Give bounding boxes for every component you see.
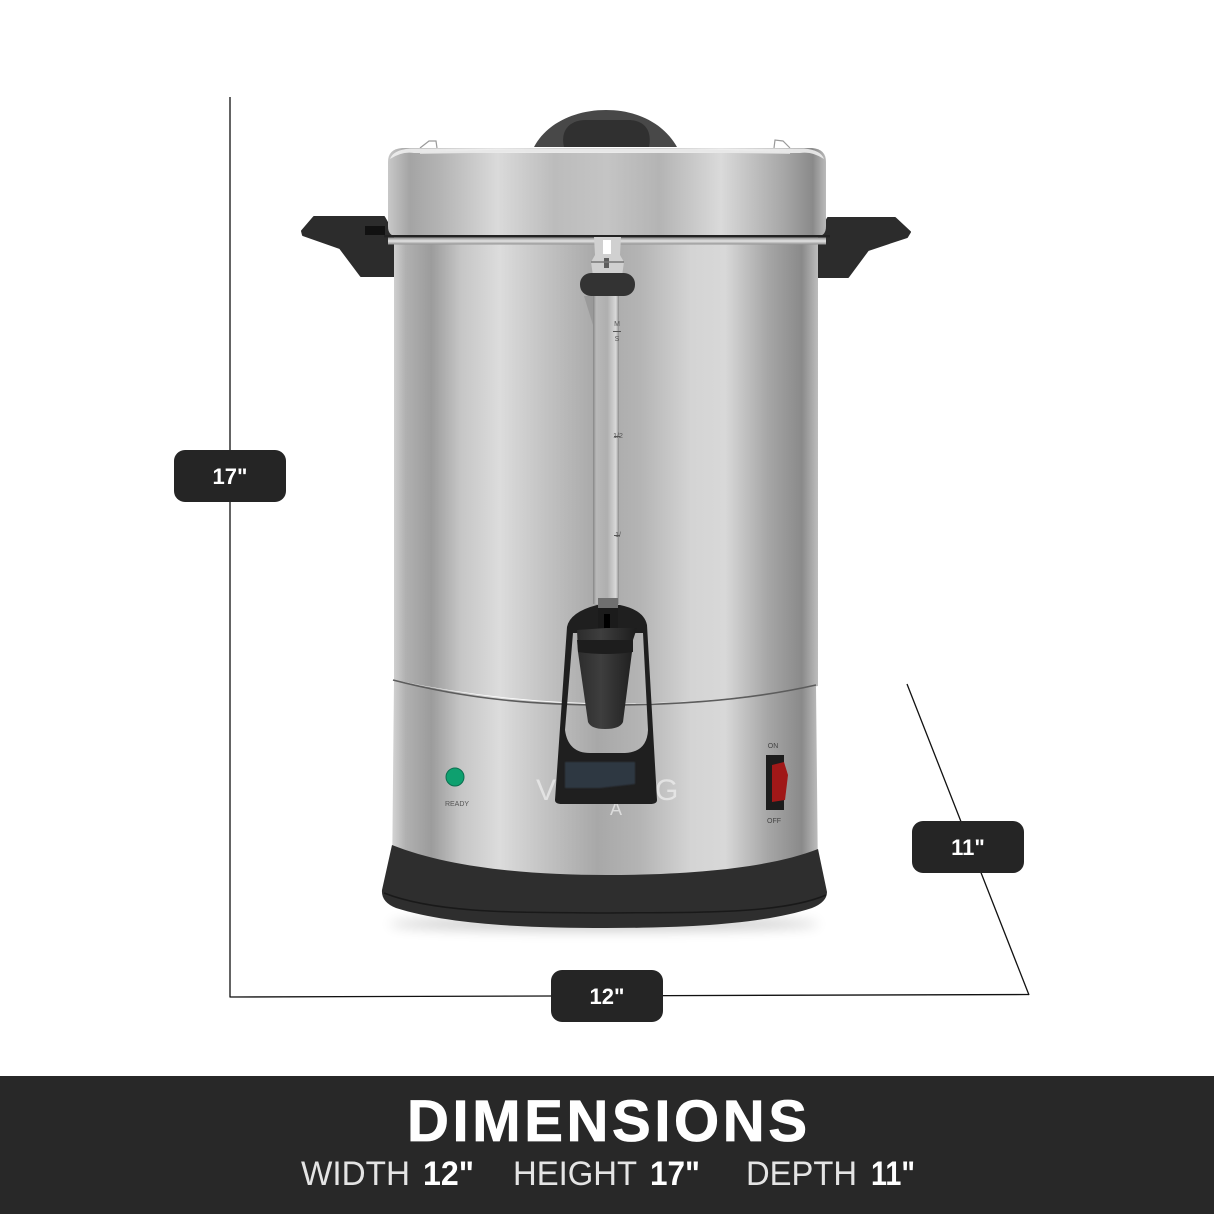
tube markings: M: [614, 321, 620, 328]
spigot stem: [598, 598, 618, 634]
sight tube: [584, 292, 623, 604]
dimensions banner: [0, 1076, 1214, 1214]
banner summary line: [301, 1155, 915, 1193]
height label: 17": [213, 464, 247, 489]
spigot frame: [555, 605, 657, 804]
tube markings: 1/2: [613, 433, 623, 440]
height dimension line: [229, 97, 231, 998]
tube markings: 1/: [615, 532, 621, 539]
depth label: [912, 821, 1024, 873]
banner summary line: 12": [423, 1155, 474, 1193]
off label: OFF: [767, 818, 781, 825]
tube markings: S: [615, 336, 620, 343]
coffee urn product illustration: [302, 110, 910, 931]
ready light: [446, 768, 464, 786]
on label: ON: [768, 743, 778, 750]
right handle: [815, 218, 910, 277]
depth dimension line: [907, 684, 1029, 995]
faded brand lettering: V: [536, 774, 556, 807]
seam between body and base: [393, 680, 816, 705]
banner summary line: WIDTH: [301, 1155, 410, 1193]
tube top fitting: [591, 237, 624, 276]
black base: [382, 845, 827, 928]
left handle: [302, 217, 397, 276]
lid: [388, 148, 826, 236]
urn base section: [392, 680, 818, 880]
spigot foot reflection: [565, 762, 635, 788]
faded brand lettering: G: [655, 774, 678, 807]
tube markings: [613, 321, 623, 539]
banner summary line: 17": [650, 1155, 700, 1193]
ready label: READY: [445, 801, 469, 808]
height label: [174, 450, 286, 502]
power switch: [766, 755, 788, 810]
floor shadow: [389, 917, 819, 931]
handle catch left: [365, 226, 385, 235]
faded brand lettering: A: [610, 799, 622, 819]
urn body upper: [394, 236, 818, 704]
banner summary line: DEPTH: [746, 1155, 857, 1193]
banner heading: DIMENSIONS: [407, 1089, 807, 1154]
width label: [551, 970, 663, 1022]
spigot cone: [577, 628, 637, 729]
banner summary line: 11": [871, 1155, 915, 1193]
lid knob: [534, 110, 677, 147]
metal rod: [388, 238, 826, 244]
lid band line: [384, 235, 830, 237]
depth label: 11": [951, 835, 985, 860]
tube grommet: [580, 273, 635, 296]
banner summary line: HEIGHT: [513, 1155, 637, 1193]
faded brand lettering: [536, 774, 678, 819]
lid clips: [420, 140, 790, 148]
width dimension line: [230, 994, 1029, 997]
width label: 12": [590, 984, 624, 1009]
